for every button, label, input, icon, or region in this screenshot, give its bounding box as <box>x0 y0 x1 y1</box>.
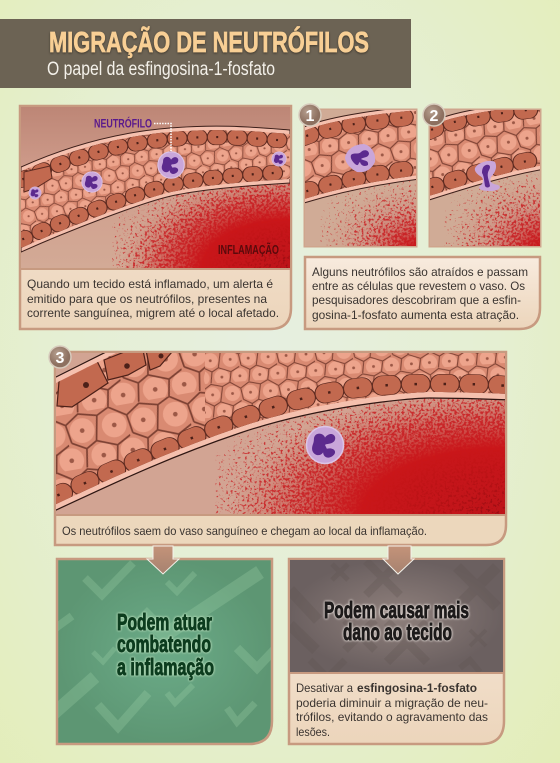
illustration: neutrophil reaching inflammation <box>54 345 515 515</box>
heading: can fight inflammation <box>117 609 214 680</box>
caption: disabling sphingosine: esfingosina-1-fosfato <box>357 681 477 695</box>
caption: steps 1 and 2: gosina-1-fosfato aumenta esta atração. <box>312 308 519 322</box>
check mark pattern <box>50 563 276 727</box>
caption: steps 1 and 2: Alguns neutrófilos são atraídos e passam <box>312 265 528 279</box>
heading: can cause more tissue damage <box>324 597 469 645</box>
neutrophil, right <box>272 152 286 166</box>
subtitle: O papel da esfingosina-1-fosfato <box>47 59 275 80</box>
panel: step 1 <box>299 104 420 247</box>
caption: disabling sphingosine: poderia diminuir a migração de neu- <box>296 696 488 710</box>
neutrophil in tissue <box>306 426 344 464</box>
large lining cells, upper left <box>56 353 172 408</box>
badge 3 <box>49 346 71 368</box>
caption: overview: corrente sanguínea, migrem até o local afetado. <box>27 306 279 320</box>
arrow: to negative outcome <box>383 546 414 574</box>
panel: negative outcome <box>289 559 504 744</box>
caption: disabling sphingosine: lesões. <box>296 725 330 739</box>
illustration: blood vessel and inflammation <box>21 107 290 268</box>
heading: can fight inflammation: Podem atuar <box>117 609 212 635</box>
arrow: to positive outcome <box>147 546 179 574</box>
caption: overview <box>27 277 279 320</box>
neutrophil crossing vessel wall <box>475 161 500 191</box>
x mark pattern <box>342 584 428 649</box>
title: MIGRAÇÃO DE NEUTRÓFILOS <box>49 25 369 59</box>
heading: can cause more tissue damage: Podem causar mais <box>324 597 469 623</box>
caption: steps 1 and 2: pesquisadores descobriram que a esfin- <box>312 293 521 307</box>
badge 1: 1 <box>306 108 315 125</box>
heading: can cause more tissue damage: dano ao tecido <box>343 619 452 645</box>
caption: overview: Quando um tecido está inflamado, um alerta é <box>27 277 273 291</box>
caption: overview: emitido para que os neutrófilos, presentes na <box>27 292 267 306</box>
badge 2 <box>423 104 445 126</box>
neutrophil, large <box>158 152 184 178</box>
badge 2: 2 <box>430 108 439 125</box>
inflammation label: INFLAMAÇÃO <box>218 242 279 257</box>
heading: can fight inflammation: a inflamação <box>117 654 214 680</box>
neutrophil squeezing toward wall <box>345 144 375 172</box>
neutrophil, left <box>82 172 102 192</box>
caption: steps 1 and 2: entre as células que revestem o vaso. Os <box>312 279 525 293</box>
caption: disabling sphingosine <box>296 681 488 739</box>
caption: step 3: Os neutrófilos saem do vaso sanguíneo e chegam ao local da inflamação. <box>62 524 427 538</box>
caption: disabling sphingosine: trófilos, evitando o agravamento das <box>296 710 488 724</box>
badge 3: 3 <box>56 350 65 367</box>
caption: disabling sphingosine: Desativar a <box>296 681 353 695</box>
panel: positive outcome <box>50 559 276 744</box>
caption: steps 1 and 2 <box>305 257 540 329</box>
neutrophil label: NEUTRÓFILO <box>94 116 152 130</box>
panel: step 2 <box>423 100 545 247</box>
dotted leader line <box>154 124 171 151</box>
panel: inflamed tissue overview <box>20 106 291 329</box>
panel: step 3 <box>49 345 515 545</box>
badge 1 <box>299 104 321 126</box>
neutrophil, far left <box>29 187 41 199</box>
title band <box>0 19 411 88</box>
heading: can fight inflammation: combatendo <box>117 631 211 657</box>
